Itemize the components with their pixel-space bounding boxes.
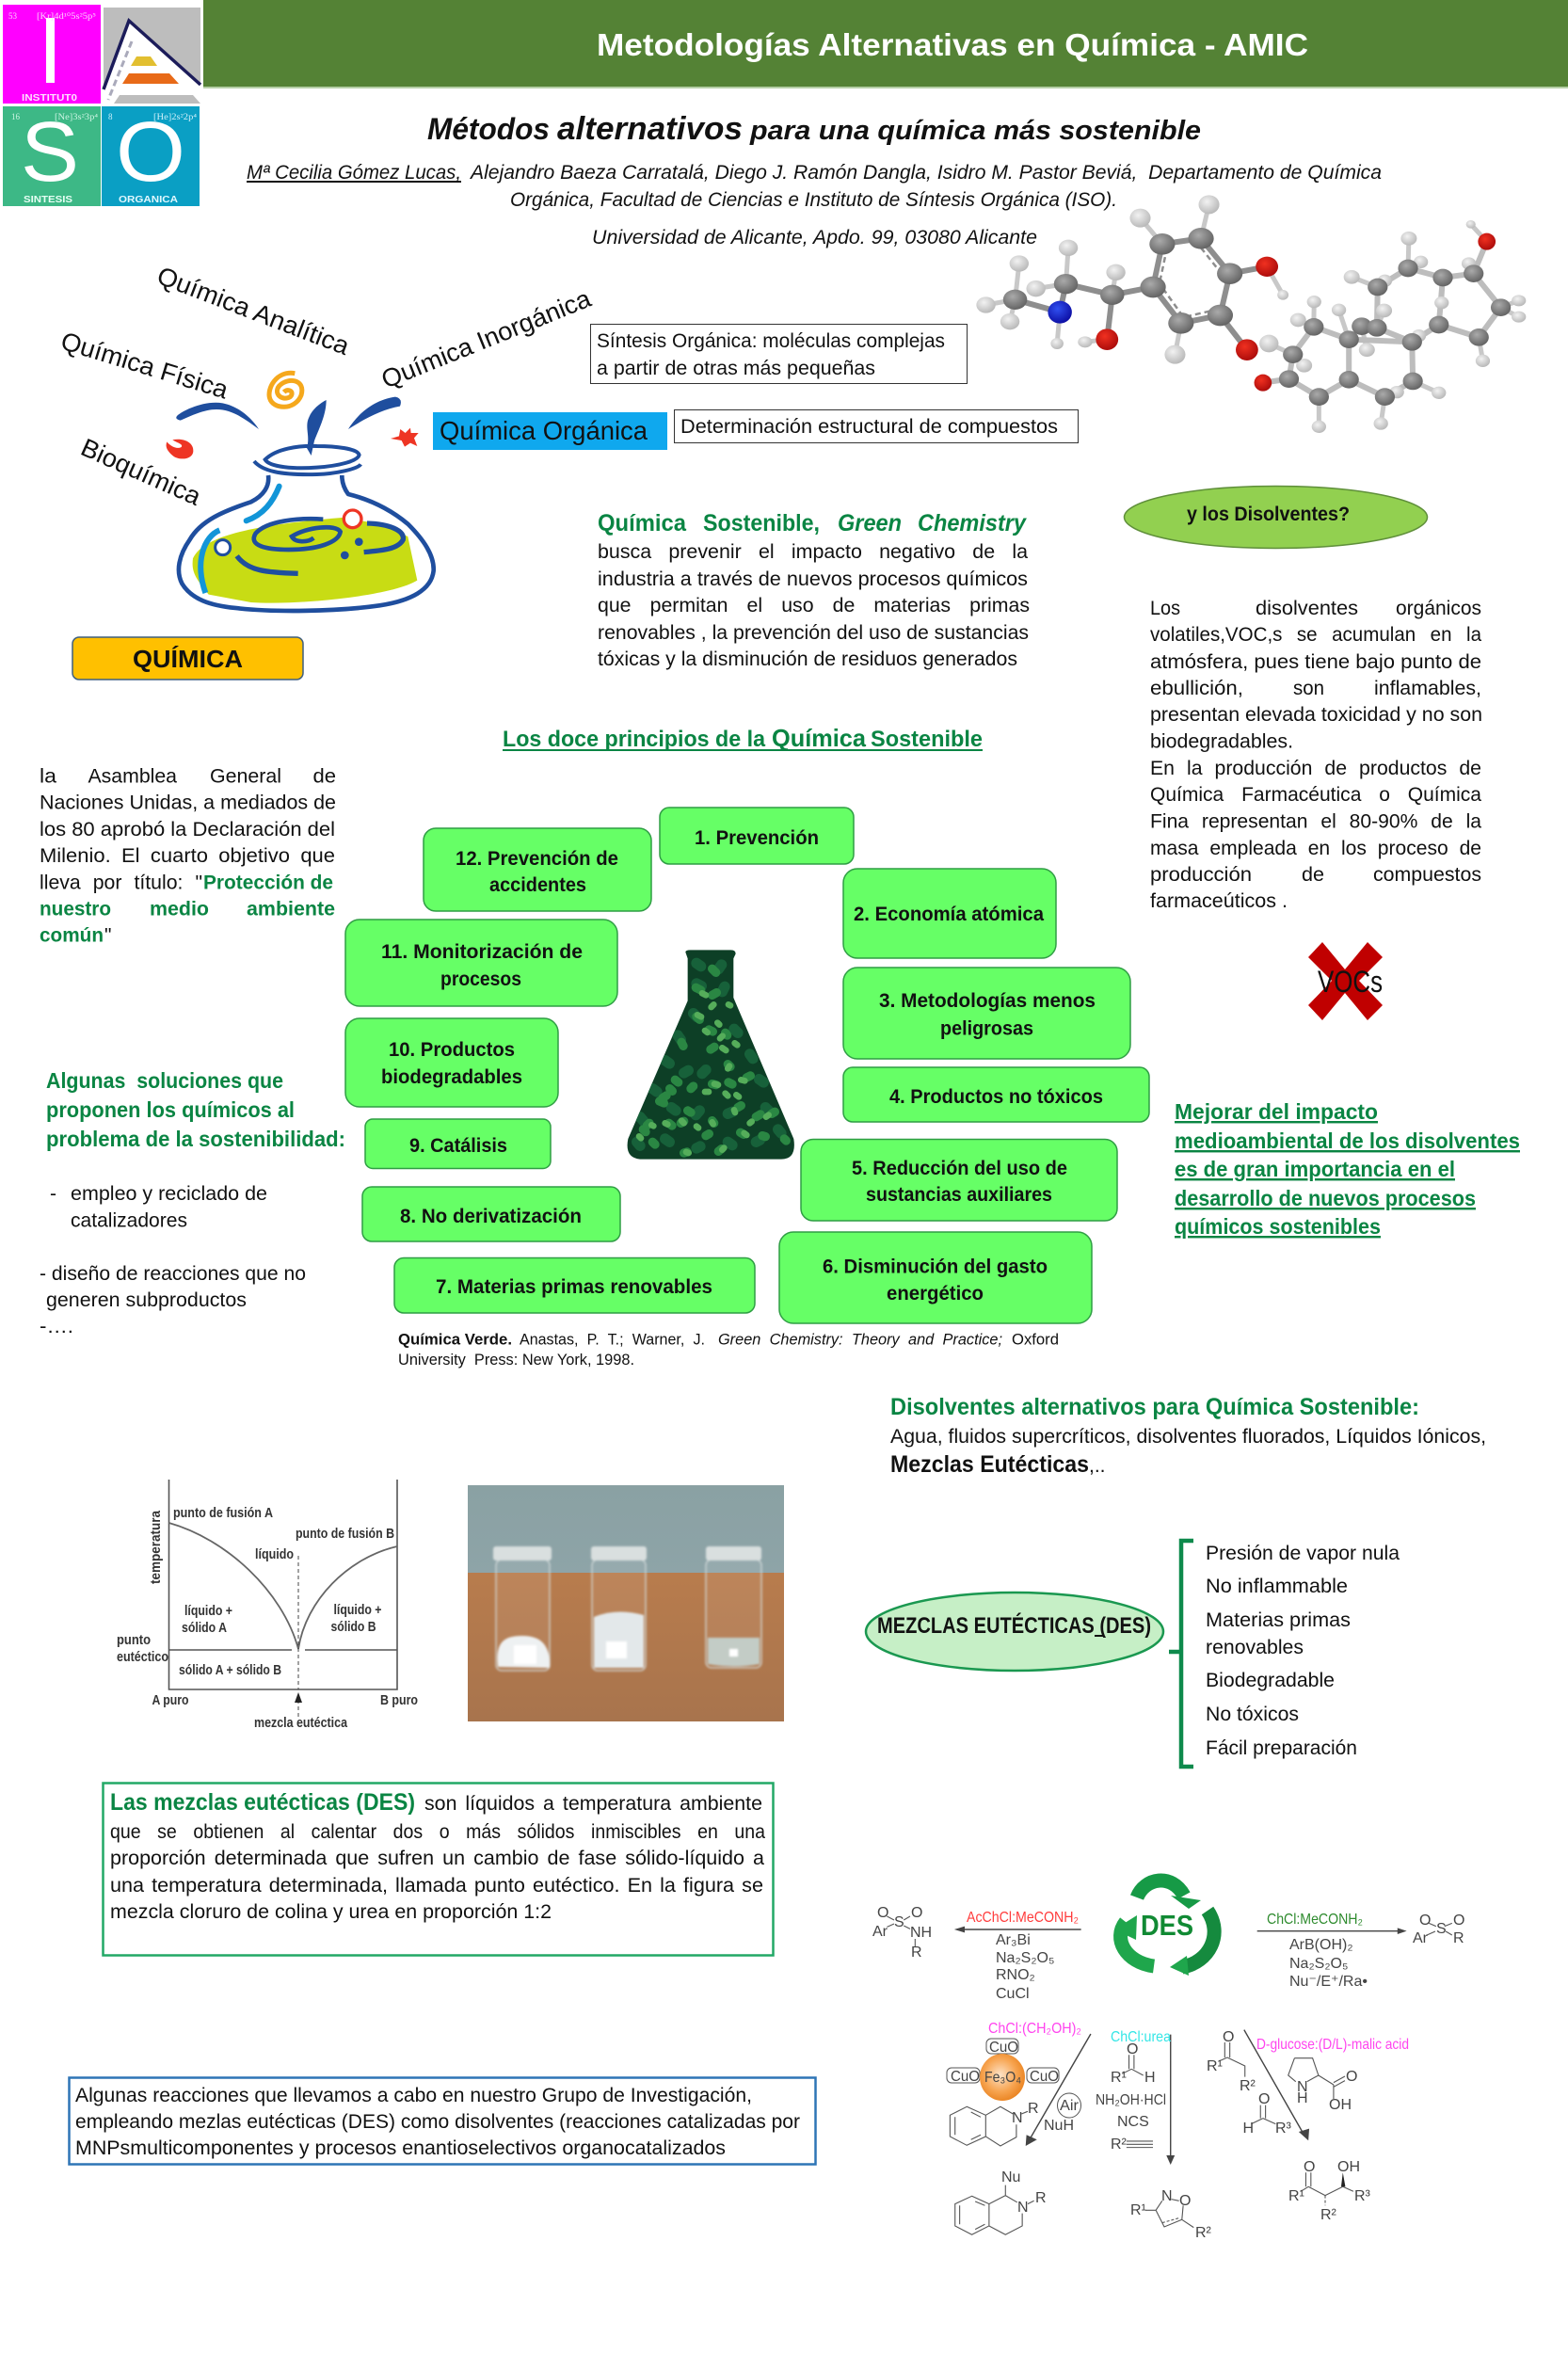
- logo: Instituto de Síntesis Orgánica: 53: [8, 11, 17, 21]
- subtitle: [427, 111, 1201, 147]
- curved discipline labels: [57, 262, 596, 511]
- authors and affiliation: Universidad de Alicante, Apdo. 99, 03080 Alicante: [592, 227, 1037, 248]
- text box: reacciones: MNPsmulticomponentes y procesos enantioselectivos organocatalizados: [75, 2137, 726, 2159]
- bracket: [1169, 1541, 1193, 1767]
- chart: eutectic phase diagram: líquido +: [333, 1603, 382, 1618]
- principle 11: 11. Monitorización de: [381, 941, 583, 963]
- principle 7: [394, 1257, 755, 1313]
- icon: chemistry round flask: [167, 373, 434, 611]
- reaction: proline aldol: R²: [1240, 2078, 1256, 2094]
- reaction: magnetic nanoparticle catalyst: CuO: [951, 2069, 980, 2085]
- principle 2: 2. Economía atómica: [854, 904, 1044, 925]
- principle 2: [843, 869, 1056, 958]
- principle 10: [345, 1018, 558, 1107]
- principle 7: 7. Materias primas renovables: [436, 1276, 712, 1298]
- reaction: proline aldol: R¹: [1207, 2058, 1223, 2074]
- ellipse: mezclas eutécticas: MEZCLAS EUTÉCTICAS (DES): [877, 1612, 1151, 1639]
- chart: eutectic phase diagram: mezcla eutéctica: [254, 1716, 348, 1731]
- text block: Química Sostenible: Chemistry: [918, 510, 1027, 536]
- text block: Asamblea General: medio: [150, 898, 209, 920]
- text block: disolventes orgánicos: biodegradables.: [1150, 730, 1293, 753]
- list: properties of eutectic mixtures: Biodegradable: [1206, 1670, 1335, 1691]
- reaction: magnetic nanoparticle catalyst: NuH: [1044, 2118, 1074, 2134]
- reaction: AcChCl sulfonamide: S: [894, 1914, 904, 1930]
- text block: disolventes alternativos: [890, 1394, 1486, 1478]
- label: Química Orgánica: Química Orgánica: [440, 416, 648, 445]
- reaction: proline aldol: O: [1258, 2091, 1270, 2107]
- authors and affiliation: Orgánica, Facultad de Ciencias e Instituto de Síntesis Orgánica (ISO).: [510, 189, 1117, 211]
- text block: disolventes orgánicos: ebullición,: [1150, 678, 1243, 699]
- principle 12: accidentes: [489, 874, 586, 896]
- chart: eutectic phase diagram: eutéctico: [117, 1650, 168, 1665]
- reaction: isoxazole synthesis: O: [1127, 2041, 1138, 2057]
- text block: disolventes alternativos: Disolventes alternativos para Química Sostenible:: [890, 1394, 1419, 1420]
- text box: mezclas eutécticas: [104, 1783, 774, 1956]
- reaction: magnetic nanoparticle catalyst: CuO: [1030, 2069, 1059, 2085]
- reaction: proline aldol: R²: [1320, 2207, 1337, 2223]
- heading: Los doce principios: Química: [772, 724, 867, 752]
- reaction: magnetic nanoparticle catalyst: N: [1012, 2110, 1023, 2126]
- text box: mezclas eutécticas: que se obtienen al calentar dos o más sólidos inmiscibles en una: [110, 1821, 765, 1843]
- principle 3: [843, 968, 1130, 1059]
- ellipse: y los Disolventes?: [1124, 486, 1427, 548]
- logo: Instituto de Síntesis Orgánica: O: [116, 105, 185, 200]
- reference: Química Verde: Green Chemistry: Theory and Practice;: [718, 1331, 1002, 1348]
- heading: Los doce principios: [503, 724, 983, 752]
- text block: disolventes alternativos: ,..: [1089, 1455, 1106, 1477]
- text block: soluciones: Algunas soluciones que: [46, 1068, 283, 1093]
- text block: Asamblea General: Naciones Unidas, a mediados de: [40, 792, 336, 813]
- list: properties of eutectic mixtures: Materias primas: [1206, 1609, 1351, 1631]
- text block: soluciones: problema de la sostenibilidad:: [46, 1127, 345, 1151]
- principle 4: [843, 1067, 1149, 1122]
- text block: disolventes orgánicos: de: [1302, 864, 1324, 886]
- logo: Instituto de Síntesis Orgánica: S: [21, 105, 79, 200]
- reaction: ChCl sulfone: Ar: [1413, 1930, 1429, 1946]
- text block: Asamblea General: común: [40, 924, 104, 947]
- curved discipline labels: Química Física: [57, 327, 232, 405]
- 3D molecule model: [976, 195, 1526, 433]
- list: properties of eutectic mixtures: Fácil preparación: [1206, 1737, 1357, 1759]
- reaction: proline aldol: N: [1297, 2079, 1308, 2095]
- subtitle: Métodos: [427, 112, 550, 146]
- reaction: isoxazole synthesis: R²: [1195, 2225, 1212, 2241]
- text block: disolventes orgánicos: orgánicos: [1396, 598, 1481, 619]
- principle 11: [345, 920, 617, 1006]
- heading: Los doce principios: Sostenible: [871, 727, 983, 752]
- reaction: magnetic nanoparticle catalyst: Fe₃O₄: [984, 2070, 1021, 2086]
- reaction: AcChCl sulfonamide: O: [911, 1905, 922, 1921]
- chart: eutectic phase diagram: líquido +: [184, 1604, 232, 1619]
- text block: disolventes orgánicos: inflamables,: [1374, 678, 1481, 699]
- text block: disolventes alternativos: Agua, fluidos supercríticos, disolventes fluorados, Líquidos Iónicos,: [890, 1426, 1486, 1448]
- logo: Instituto de Síntesis Orgánica: INSTITUT0: [22, 93, 78, 104]
- principle 9: 9. Catálisis: [409, 1135, 507, 1157]
- reaction: proline aldol: O: [1223, 2029, 1234, 2045]
- reaction: ChCl sulfone: ArB(OH)₂: [1289, 1937, 1353, 1953]
- reaction: AcChCl sulfonamide: CuCl: [996, 1986, 1030, 2002]
- text block: disolventes orgánicos: atmósfera, pues tiene bajo punto de: [1150, 651, 1481, 673]
- reaction: proline aldol: H: [1297, 2090, 1308, 2106]
- text box: mezclas eutécticas: son líquidos a temperatura ambiente: [424, 1793, 762, 1815]
- principle 3: 3. Metodologías menos: [879, 990, 1096, 1012]
- text block: disolventes orgánicos: En la producción de productos de: [1150, 758, 1481, 779]
- text block: soluciones: empleo y reciclado de: [71, 1183, 267, 1205]
- reaction: isoxazole synthesis: R²: [1111, 2137, 1128, 2153]
- principle 4: 4. Productos no tóxicos: [889, 1086, 1103, 1108]
- text block: Química Sostenible: que permitan el uso de materias primas: [598, 595, 1030, 616]
- reaction: proline aldol: OH: [1329, 2097, 1352, 2113]
- authors and affiliation: Alejandro Baeza Carratalá, Diego J. Ramón Dangla, Isidro M. Pastor Beviá, Departamento de Química: [469, 162, 1382, 184]
- text block: soluciones: - diseño de reacciones que no: [40, 1263, 306, 1285]
- principle 6: 6. Disminución del gasto: [823, 1256, 1048, 1278]
- list: properties of eutectic mixtures: Presión de vapor nula: [1206, 1543, 1400, 1564]
- principle 11: procesos: [440, 968, 521, 990]
- text block: disolventes orgánicos: Química Farmacéutica o Química: [1150, 784, 1481, 806]
- reference: Química Verde: Anastas, P. T.; Warner, J.: [520, 1331, 705, 1348]
- reaction: proline aldol: R³: [1275, 2121, 1292, 2137]
- reaction: proline aldol: [1207, 2029, 1409, 2223]
- reaction: proline aldol: R¹: [1288, 2188, 1304, 2204]
- icon: VOCs crossed out: VOCs: [1318, 965, 1383, 999]
- text block: soluciones: catalizadores: [71, 1210, 187, 1231]
- text box: mezclas eutécticas: Las mezclas eutécticas (DES): [110, 1789, 415, 1816]
- list: properties of eutectic mixtures: No tóxicos: [1206, 1704, 1299, 1725]
- reaction: magnetic nanoparticle catalyst: Air: [1060, 2098, 1080, 2114]
- principle 8: [362, 1187, 620, 1241]
- logo: Instituto de Síntesis Orgánica: [He]2s²2p⁴: [153, 112, 197, 121]
- principle 6: [779, 1232, 1092, 1323]
- text block: Asamblea General: General: [210, 766, 281, 787]
- text block: Asamblea General: [40, 766, 336, 947]
- logo: Instituto de Síntesis Orgánica: SINTESIS: [24, 195, 72, 205]
- curved discipline labels: Química Inorgánica: [377, 284, 596, 394]
- text block: Química Sostenible: industria a través de nuevos procesos químicos: [598, 568, 1028, 590]
- subtitle: alternativos: [557, 111, 743, 147]
- reaction: AcChCl sulfonamide: [872, 1905, 1079, 2002]
- principle 9: [365, 1119, 551, 1169]
- vial 3: [706, 1546, 761, 1668]
- reaction scheme: bonds and arrows: [887, 1916, 1452, 2234]
- reaction: ChCl sulfone: Nu⁻/E⁺/Ra•: [1289, 1974, 1368, 1990]
- reaction: magnetic nanoparticle catalyst: [947, 2021, 1081, 2216]
- reaction: proline aldol: D-glucose:(D/L)-malic acid: [1256, 2037, 1409, 2053]
- banner title: Metodologías Alternativas en Química - AMIC: [597, 27, 1308, 62]
- text block: disolventes orgánicos: [1150, 598, 1482, 912]
- text block: mejorar el impacto: Mejorar del impacto: [1175, 1099, 1378, 1124]
- text block: soluciones: -….: [40, 1316, 73, 1337]
- ellipse: mezclas eutécticas: [866, 1593, 1163, 1671]
- reaction: AcChCl sulfonamide: NH: [910, 1925, 932, 1941]
- text block: disolventes orgánicos: masa empleada en los proceso de: [1150, 838, 1481, 859]
- principle 12: 12. Prevención de: [456, 848, 618, 870]
- reaction: isoxazole synthesis: N: [1161, 2188, 1173, 2204]
- text block: mejorar el impacto: medioambiental de los disolventes: [1175, 1128, 1520, 1153]
- text block: Química Sostenible: busca prevenir el impacto negativo de la: [598, 541, 1028, 563]
- vial 2: [591, 1546, 647, 1671]
- principle 1: 1. Prevención: [695, 827, 819, 849]
- button: QUÍMICA: QUÍMICA: [133, 645, 243, 673]
- principle 5: 5. Reducción del uso de: [852, 1158, 1067, 1179]
- twelve principles: [345, 808, 1149, 1323]
- reference: Química Verde: Oxford: [1012, 1331, 1059, 1348]
- logo: Instituto de Síntesis Orgánica: [Ne]3s²3p⁴: [55, 112, 98, 121]
- reaction: AcChCl sulfonamide: Ar: [872, 1924, 888, 1940]
- logo: Instituto de Síntesis Orgánica: 8: [108, 112, 113, 121]
- text block: Asamblea General: los 80 aprobó la Declaración del: [40, 819, 335, 840]
- text block: disolventes orgánicos: Fina representan el 80-90% de la: [1150, 811, 1481, 832]
- text box: mezclas eutécticas: proporción determinada que sufren un cambio de fase sólido-líquido a: [110, 1848, 764, 1869]
- reaction: AcChCl sulfonamide: O: [877, 1905, 888, 1921]
- text box: mezclas eutécticas: una temperatura determinada, llamada punto eutéctico. En la figura se: [110, 1875, 763, 1897]
- text block: Química Sostenible: tóxicas y la disminución de residuos generados: [598, 648, 1017, 670]
- text box: reacciones: empleando mezlas eutécticas (DES) como disolventes (reacciones catalizadas por: [75, 2111, 800, 2133]
- reaction: magnetic nanoparticle catalyst: ChCl:(CH₂OH)₂: [988, 2021, 1081, 2037]
- chart: eutectic phase diagram: B puro: [380, 1693, 418, 1708]
- principle 5: [801, 1139, 1117, 1221]
- principle 5: sustancias auxiliares: [866, 1184, 1052, 1206]
- text block: Química Sostenible: Sostenible,: [703, 510, 820, 536]
- text block: Asamblea General: Protección de: [203, 872, 333, 894]
- subtitle: para una química más sostenible: [749, 116, 1201, 146]
- principle 12: [424, 828, 651, 911]
- text block: disolventes orgánicos: producción: [1150, 864, 1252, 886]
- text box: reacciones: [70, 2078, 815, 2165]
- reaction: proline aldol: O: [1346, 2069, 1357, 2085]
- icon: DES recycling arrows: DES: [1141, 1909, 1193, 1942]
- text block: mejorar el impacto: desarrollo de nuevos procesos: [1175, 1186, 1476, 1210]
- reaction: ChCl sulfone: S: [1436, 1921, 1447, 1937]
- reference: Química Verde: University Press: New York, 1998.: [398, 1351, 634, 1369]
- text block: disolventes orgánicos: farmaceúticos .: [1150, 890, 1288, 912]
- text block: disolventes orgánicos: compuestos: [1373, 864, 1481, 886]
- chart: eutectic phase diagram: sólido A + sólido B: [179, 1663, 281, 1678]
- text block: disolventes orgánicos: disolventes: [1256, 598, 1358, 619]
- logo: Instituto de Síntesis Orgánica: ORGANICA: [119, 195, 178, 205]
- principle 10: biodegradables: [381, 1066, 522, 1088]
- text block: Asamblea General: nuestro: [40, 898, 111, 920]
- text block: mejorar el impacto: [1175, 1099, 1520, 1239]
- vial 1: [493, 1546, 552, 1671]
- text block: mejorar el impacto: es de gran importancia en el: [1175, 1157, 1455, 1181]
- chart: eutectic phase diagram: líquido: [255, 1547, 294, 1562]
- reaction: isoxazole synthesis: H: [1144, 2070, 1156, 2086]
- reaction: magnetic nanoparticle catalyst: Nu: [1001, 2169, 1020, 2185]
- curved discipline labels: Bioquímica: [77, 433, 206, 511]
- text block: Química Sostenible: [598, 510, 1030, 670]
- text box: reacciones: Algunas reacciones que llevamos a cabo en nuestro Grupo de Investigación,: [75, 2085, 752, 2106]
- reaction: AcChCl sulfonamide: R: [911, 1945, 922, 1961]
- reaction: proline aldol: O: [1304, 2159, 1315, 2175]
- text block: disolventes orgánicos: son: [1293, 678, 1324, 699]
- text block: Asamblea General: ": [104, 924, 111, 947]
- text block: disolventes orgánicos: presentan elevada toxicidad y no son: [1150, 704, 1482, 726]
- text block: disolventes alternativos: Mezclas Eutécticas: [890, 1451, 1089, 1478]
- curved discipline labels: Química Analítica: [153, 262, 354, 360]
- logo: Instituto de Síntesis Orgánica: 16: [11, 112, 21, 121]
- authors and affiliation: Mª Cecilia Gómez Lucas,: [247, 162, 461, 184]
- text block: soluciones: generen subproductos: [46, 1289, 247, 1311]
- text block: Asamblea General: lleva por título: ": [40, 872, 202, 894]
- chart: eutectic phase diagram: punto de fusión A: [173, 1506, 273, 1521]
- principle 1: [660, 808, 854, 864]
- reaction: AcChCl sulfonamide: RNO₂: [996, 1967, 1035, 1983]
- text block: soluciones: proponen los químicos al: [46, 1097, 295, 1122]
- list: properties of eutectic mixtures: renovables: [1206, 1637, 1304, 1658]
- chart: eutectic phase diagram: [117, 1480, 418, 1731]
- icon: VOCs crossed out: [1308, 942, 1383, 1020]
- text block: mejorar el impacto: químicos sostenibles: [1175, 1214, 1381, 1239]
- text block: Asamblea General: de: [312, 766, 336, 787]
- box: síntesis orgánica: [591, 324, 968, 384]
- text block: Asamblea General: la: [40, 766, 56, 787]
- box: determinación estructural: Determinación estructural de compuestos: [680, 416, 1058, 438]
- list: properties of eutectic mixtures: No inflammable: [1206, 1576, 1348, 1597]
- reaction: ChCl sulfone: [1267, 1912, 1464, 1990]
- reaction: isoxazole synthesis: R¹: [1130, 2202, 1146, 2218]
- ellipse: y los Disolventes?: y los Disolventes?: [1187, 504, 1350, 525]
- text block: disolventes orgánicos: Los: [1150, 598, 1180, 619]
- text block: soluciones: -: [50, 1183, 56, 1205]
- reaction: magnetic nanoparticle catalyst: N: [1017, 2200, 1029, 2216]
- chart: eutectic phase diagram: temperatura: [149, 1510, 164, 1584]
- text block: Asamblea General: ambiente: [247, 898, 335, 920]
- principle 3: peligrosas: [940, 1018, 1033, 1039]
- chart: eutectic phase diagram: punto de fusión B: [296, 1527, 394, 1542]
- text block: Asamblea General: Asamblea: [88, 766, 177, 787]
- reaction: AcChCl sulfonamide: Ar₃Bi: [996, 1932, 1031, 1948]
- reaction: proline aldol: R³: [1354, 2188, 1371, 2204]
- box: síntesis orgánica: a partir de otras más pequeñas: [597, 358, 875, 379]
- text block: Asamblea General: Milenio. El cuarto objetivo que: [40, 845, 335, 867]
- reaction: proline aldol: H: [1242, 2121, 1254, 2137]
- list: properties of eutectic mixtures: [1206, 1543, 1400, 1759]
- reaction: ChCl sulfone: Na₂S₂O₅: [1289, 1956, 1348, 1972]
- logo: Instituto de Síntesis Orgánica: [Kr]4d¹⁰5s²5p⁵: [37, 11, 96, 21]
- box: determinación estructural: [674, 410, 1079, 442]
- reaction: magnetic nanoparticle catalyst: CuO: [989, 2040, 1018, 2056]
- authors and affiliation: [247, 162, 1382, 248]
- reaction: isoxazole synthesis: NH₂OH·HCl: [1096, 2092, 1166, 2108]
- reaction: ChCl sulfone: O: [1453, 1913, 1464, 1929]
- header banner: [203, 0, 1568, 88]
- reaction: isoxazole synthesis: O: [1179, 2193, 1191, 2209]
- reaction: ChCl sulfone: R: [1453, 1930, 1464, 1946]
- reaction: isoxazole synthesis: NCS: [1117, 2114, 1149, 2130]
- logo: Instituto de Síntesis Orgánica: [3, 5, 200, 206]
- reaction: magnetic nanoparticle catalyst: R: [1028, 2101, 1039, 2117]
- text block: Química Sostenible: Química: [598, 510, 687, 536]
- text block: disolventes orgánicos: volatiles,VOC,s se acumulan en la: [1150, 624, 1481, 646]
- reaction: isoxazole synthesis: ChCl:urea: [1111, 2029, 1171, 2045]
- photo: three vials of eutectic mixture: [468, 1485, 784, 1721]
- reference: Química Verde: Química Verde.: [398, 1331, 512, 1348]
- chart: eutectic phase diagram: sólido A: [182, 1621, 227, 1636]
- reaction: ChCl sulfone: O: [1419, 1913, 1431, 1929]
- box: síntesis orgánica: Síntesis Orgánica: moléculas complejas: [597, 330, 945, 352]
- reaction: proline aldol: OH: [1337, 2159, 1360, 2175]
- icon: DES recycling arrows: [1114, 1881, 1214, 1976]
- principle 10: 10. Productos: [389, 1039, 515, 1061]
- reference: Química Verde: [398, 1331, 1059, 1369]
- principle 6: energético: [887, 1283, 984, 1305]
- chart: eutectic phase diagram: sólido B: [331, 1620, 376, 1635]
- chart: eutectic phase diagram: punto: [117, 1633, 151, 1648]
- reaction: isoxazole synthesis: R¹: [1111, 2070, 1127, 2086]
- principle 8: 8. No derivatización: [400, 1206, 582, 1227]
- reaction: AcChCl sulfonamide: AcChCl:MeCONH₂: [967, 1910, 1079, 1926]
- heading: Los doce principios: Los doce principios de la: [503, 727, 766, 752]
- reaction: magnetic nanoparticle catalyst: R: [1035, 2190, 1047, 2206]
- text block: soluciones: [40, 1068, 345, 1337]
- text block: Química Sostenible: Green: [838, 510, 902, 536]
- reaction: AcChCl sulfonamide: Na₂S₂O₅: [996, 1950, 1054, 1966]
- icon: leaf-filled Erlenmeyer flask: [628, 950, 794, 1160]
- reaction: ChCl sulfone: ChCl:MeCONH₂: [1267, 1912, 1363, 1928]
- reaction: isoxazole synthesis: [1096, 2029, 1212, 2241]
- text block: Química Sostenible: renovables , la prevención del uso de sustancias: [598, 622, 1029, 644]
- text box: mezclas eutécticas: mezcla cloruro de colina y urea en proporción 1:2: [110, 1901, 552, 1923]
- button: QUÍMICA: [72, 637, 303, 680]
- chart: eutectic phase diagram: A puro: [152, 1693, 189, 1708]
